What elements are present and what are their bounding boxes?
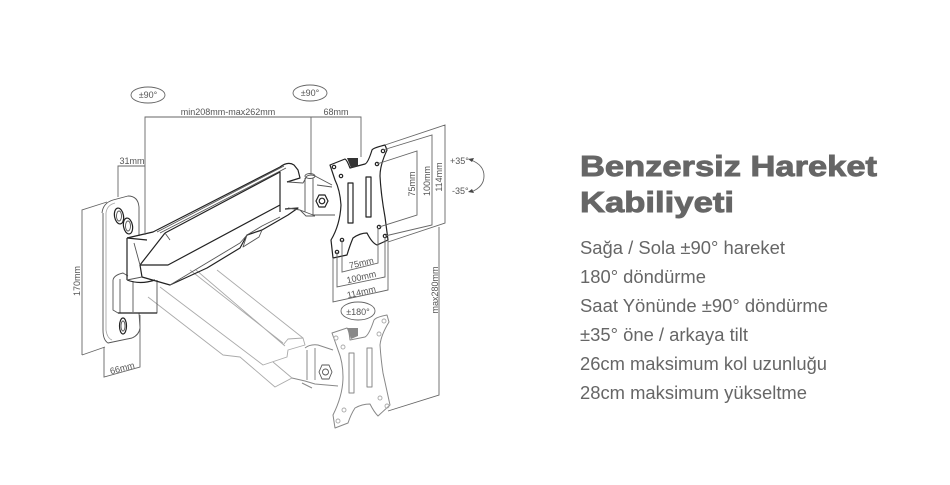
heading: Kabiliyeti <box>580 187 734 219</box>
dimension labels: 31mm <box>119 156 145 166</box>
dimension labels <box>72 107 444 376</box>
heading <box>580 151 877 219</box>
tilt head bracket <box>288 174 335 216</box>
feature list <box>580 237 828 403</box>
panel: monitor arm technical drawing <box>72 85 484 428</box>
icon: rotation 90 badge left: ±90° <box>139 90 158 100</box>
lower arm position in grey <box>148 270 390 428</box>
dimension labels: 100mm <box>346 269 377 285</box>
dimension labels: 75mm <box>348 255 375 271</box>
icon: tilt arrow: -35° <box>452 186 469 196</box>
dimension lines <box>82 117 445 411</box>
dimension labels: 170mm <box>72 266 82 296</box>
feature list: Sağa / Sola ±90° hareket <box>580 237 785 258</box>
feature list: 28cm maksimum yükseltme <box>580 382 807 403</box>
wall plate <box>102 196 140 343</box>
base hinge <box>113 238 157 313</box>
heading: Benzersiz Hareket <box>580 151 877 183</box>
upper arm <box>127 163 300 285</box>
dimension labels: 114mm <box>434 162 444 192</box>
icon: rotation 90 badge right <box>293 85 327 101</box>
feature list: ±35° öne / arkaya tilt <box>580 324 748 345</box>
icon: tilt arrow <box>450 156 484 196</box>
dimension labels: 68mm <box>323 107 349 117</box>
dimension labels: min208mm-max262mm <box>181 107 275 117</box>
VESA plate <box>330 145 388 258</box>
dimension labels: 75mm <box>407 171 417 197</box>
icon: tilt arrow: +35° <box>450 156 469 166</box>
icon: rotation 90 badge left <box>131 87 165 103</box>
dimension labels: 100mm <box>422 166 432 196</box>
icon: rotation 180 badge: ±180° <box>346 307 370 317</box>
dimension labels: 66mm <box>109 360 136 376</box>
feature list: Saat Yönünde ±90° döndürme <box>580 295 828 316</box>
icon: rotation 180 badge <box>341 302 375 320</box>
icon: rotation 90 badge right: ±90° <box>301 88 320 98</box>
feature list: 26cm maksimum kol uzunluğu <box>580 353 827 374</box>
feature list: 180° döndürme <box>580 266 706 287</box>
dimension labels: 114mm <box>346 284 377 300</box>
dimension labels: max280mm <box>430 266 440 314</box>
